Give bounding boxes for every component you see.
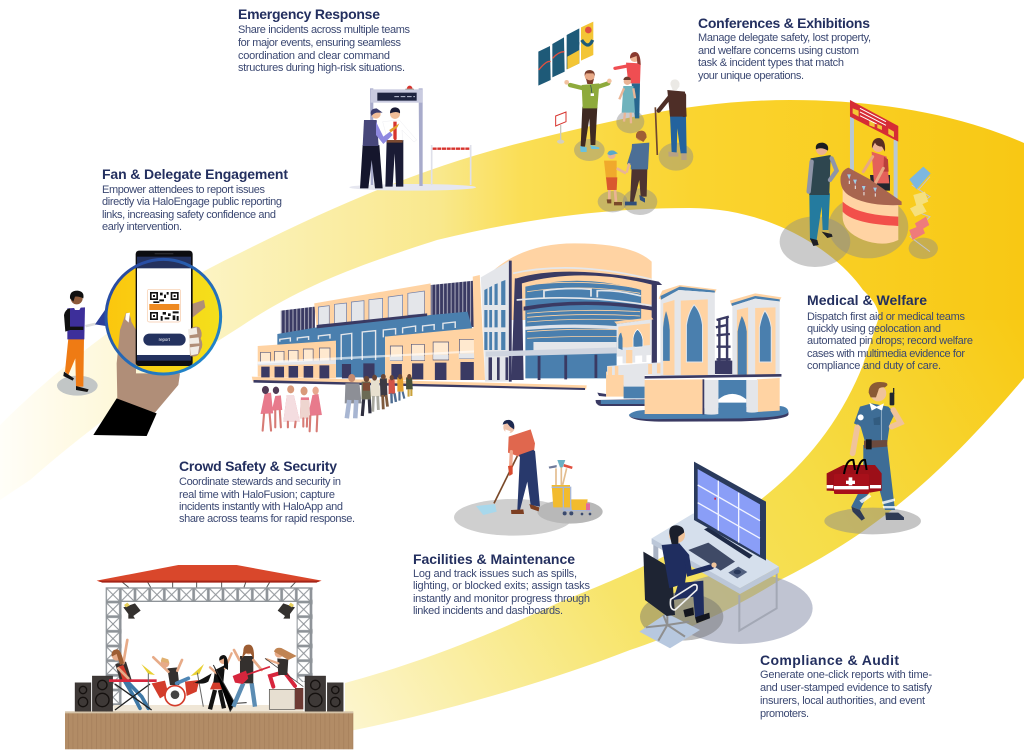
- heading: Fan & Delegate Engagement: [102, 166, 288, 182]
- body: links, increasing safety confidence and: [102, 209, 276, 221]
- illustration: cleaner mopping: [454, 420, 603, 536]
- body: task & incident types that match: [698, 57, 844, 69]
- body: automated pin drops; record welfare: [807, 335, 973, 347]
- spotlights: [123, 603, 295, 619]
- desk: [652, 513, 779, 631]
- body: early intervention.: [102, 221, 182, 233]
- ribbon: lower yellow path: [345, 320, 1024, 732]
- body: compliance and duty of care.: [807, 360, 941, 372]
- woman and girl: [615, 52, 641, 123]
- man in green: [564, 70, 612, 152]
- cleaning cart: [549, 460, 592, 515]
- mop: [476, 456, 517, 515]
- body: Manage delegate safety, lost property,: [698, 32, 871, 44]
- heading: Compliance & Audit: [760, 652, 899, 668]
- body: and user-stamped evidence to satisfy: [760, 682, 932, 694]
- operator and chair: [643, 525, 717, 641]
- body: Dispatch first aid or medical teams: [807, 311, 966, 323]
- worker: [503, 420, 540, 514]
- monitor: [694, 462, 766, 561]
- girls group: [261, 385, 322, 431]
- floor shadows: [574, 110, 938, 267]
- hand holding phone: report: [159, 337, 171, 342]
- heading: Emergency Response: [238, 6, 380, 22]
- keyboard player: [109, 640, 157, 710]
- truss: [97, 565, 322, 712]
- body: and welfare concerns using custom: [698, 45, 859, 57]
- posters on wall: [538, 22, 593, 86]
- magnifier ring: [106, 259, 221, 374]
- queue of people: [345, 374, 413, 418]
- body: incidents instantly with HaloApp and: [179, 501, 343, 513]
- medic: [827, 382, 904, 521]
- hand holding phone: [93, 251, 205, 436]
- guitarist: [233, 645, 270, 707]
- illustration: exhibition visitors and information stand: [538, 22, 938, 267]
- body: real time with HaloFusion; capture: [179, 489, 335, 501]
- body: instantly and monitor progress through: [413, 593, 590, 605]
- keyboard and mouse: [688, 543, 747, 578]
- body: insurers, local authorities, and event: [760, 695, 925, 707]
- body: Empower attendees to report issues: [102, 184, 266, 196]
- text block: Fan & Delegate Engagement: [102, 166, 288, 233]
- text block: Conferences & Exhibitions: [698, 15, 871, 82]
- body: lighting, or blocked exits; assign tasks: [413, 580, 590, 592]
- body: Generate one-click reports with time-: [760, 669, 932, 681]
- text block: Crowd Safety & Security: [179, 458, 355, 525]
- text block: Compliance & Audit: [760, 652, 932, 720]
- body: quickly using geolocation and: [807, 323, 941, 335]
- child in yellow and parent: [604, 131, 649, 205]
- shadows: [639, 508, 921, 648]
- body: structures during high-risk situations.: [238, 62, 405, 74]
- heading: Facilities & Maintenance: [413, 551, 575, 567]
- icon: metal detector and security guard: [349, 86, 476, 191]
- body: coordination and clear command: [238, 50, 390, 62]
- illustration: attendee with QR code on phone: [57, 251, 221, 436]
- body: for major events, ensuring seamless: [238, 37, 402, 49]
- stage deck: [65, 705, 353, 749]
- body: linked incidents and dashboards.: [413, 605, 563, 617]
- stand counter and staff: [809, 100, 902, 246]
- heading: Conferences & Exhibitions: [698, 15, 870, 31]
- body: directly via HaloEngage public reporting: [102, 196, 282, 208]
- drummer and kit: [141, 657, 204, 707]
- text block: Emergency Response: [238, 6, 410, 74]
- body: promoters.: [760, 708, 809, 720]
- singer: [193, 653, 247, 712]
- body: your unique operations.: [698, 70, 804, 82]
- text block: Medical & Welfare: [807, 292, 973, 372]
- body: Coordinate stewards and security in: [179, 476, 341, 488]
- heading: Medical & Welfare: [807, 292, 927, 308]
- magnifier circle: [95, 259, 221, 374]
- body: Share incidents across multiple teams: [238, 24, 410, 36]
- illustration: control room and medic: [639, 382, 921, 648]
- illustration: stage with band: [65, 565, 353, 749]
- speakers: [75, 676, 343, 711]
- older man with cane: [655, 79, 687, 160]
- text block: Facilities & Maintenance: [413, 551, 590, 617]
- lead singer on amp: [265, 648, 303, 709]
- ribbon: upper yellow path: [0, 100, 1024, 500]
- brochure rack: [909, 167, 931, 252]
- body: cases with multimedia evidence for: [807, 348, 965, 360]
- body: share across teams for rapid response.: [179, 513, 355, 525]
- body: Log and track issues such as spills,: [413, 568, 577, 580]
- walking attendee: [57, 291, 98, 396]
- illustration: convention centre with crowds: [252, 243, 788, 431]
- sign stand: [556, 112, 566, 144]
- heading: Crowd Safety & Security: [179, 458, 337, 474]
